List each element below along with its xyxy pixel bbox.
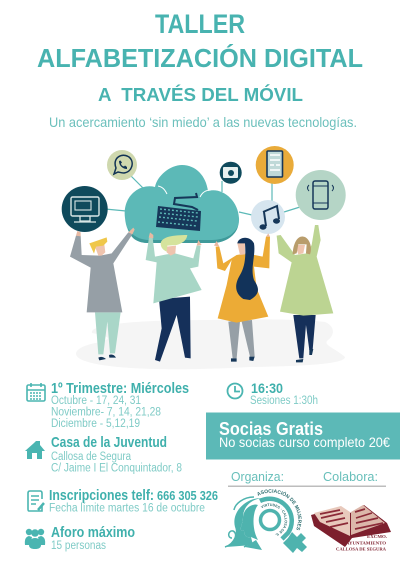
cloud bbox=[125, 165, 239, 243]
icon: WhatsApp bbox=[107, 150, 137, 180]
icon: calendar bbox=[27, 383, 45, 401]
logo: asociación de mujeres: VIRTUDES · CALLOSA DE S. bbox=[260, 503, 288, 536]
icon: music note bbox=[251, 200, 285, 234]
logo: asociación de mujeres bbox=[224, 489, 307, 553]
label: colabora: Colabora: bbox=[323, 469, 378, 484]
registration heading: 666 305 326 bbox=[157, 489, 218, 503]
icon: form with pencil bbox=[28, 491, 44, 511]
icon: tablet bbox=[256, 146, 294, 184]
logo: ayuntamiento: EXCMO. bbox=[367, 534, 387, 539]
label: organiza: Organiza: bbox=[231, 469, 284, 484]
location heading: Casa de la Juventud bbox=[51, 434, 167, 451]
subtitle: A través del móvil: A TRAVÉS DEL MÓVIL bbox=[98, 84, 303, 105]
schedule dates bbox=[51, 395, 161, 430]
person 1 bbox=[70, 228, 135, 360]
capacity heading: Aforo máximo bbox=[51, 524, 135, 541]
schedule dates: Diciembre - 5,12,19 bbox=[51, 418, 140, 430]
schedule dates: Noviembre- 7, 14, 21,28 bbox=[51, 406, 161, 418]
registration heading: Inscripciones telf: bbox=[49, 487, 154, 504]
connector lines bbox=[105, 175, 300, 215]
location details: Callosa de Segura bbox=[51, 451, 132, 463]
ground shadow bbox=[76, 319, 345, 369]
icon: keyboard bbox=[156, 193, 201, 231]
illustration: people holding cloud and app icons bbox=[62, 146, 346, 369]
title: Taller: TALLER bbox=[155, 9, 245, 39]
location details: C/ Jaime I El Conquintador, 8 bbox=[51, 462, 182, 474]
icon: clock bbox=[228, 384, 242, 398]
title: Alfabetización Digital: ALFABETIZACIÓN DIGITAL bbox=[37, 43, 363, 73]
location details bbox=[51, 451, 182, 474]
icon: computer bbox=[62, 186, 108, 232]
logo: ayuntamiento: AYUNTAMIENTO bbox=[346, 540, 387, 546]
tagline: Un acercamiento ‘sin miedo’ a las nuevas tecnologías. bbox=[49, 114, 357, 130]
person 2 bbox=[146, 232, 202, 362]
time: 16:30 bbox=[251, 380, 283, 396]
logo: asociación de mujeres: ASOCIACIÓN DE MUJERES bbox=[258, 489, 302, 530]
person 4 bbox=[277, 225, 333, 362]
icon: camera bbox=[220, 162, 242, 184]
schedule dates: Octubre - 17, 24, 31 bbox=[51, 395, 141, 407]
registration deadline: Fecha límite martes 16 de octubre bbox=[49, 502, 205, 514]
icon: house bbox=[25, 441, 45, 459]
session length: Sesiones 1:30h bbox=[250, 395, 318, 407]
icon: smartphone bbox=[296, 170, 346, 220]
logo: ayuntamiento: CALLOSA DE SEGURA bbox=[336, 546, 387, 552]
logo: ayuntamiento bbox=[311, 505, 391, 552]
capacity detail: 15 personas bbox=[51, 540, 106, 552]
icon: people group bbox=[25, 529, 45, 549]
price banner bbox=[206, 412, 400, 460]
price banner: Socias Gratis bbox=[219, 419, 323, 439]
person 3 bbox=[214, 233, 270, 362]
price banner: No socias curso completo 20€ bbox=[219, 435, 390, 450]
schedule heading: 1º Trimestre: Miércoles bbox=[51, 380, 189, 397]
